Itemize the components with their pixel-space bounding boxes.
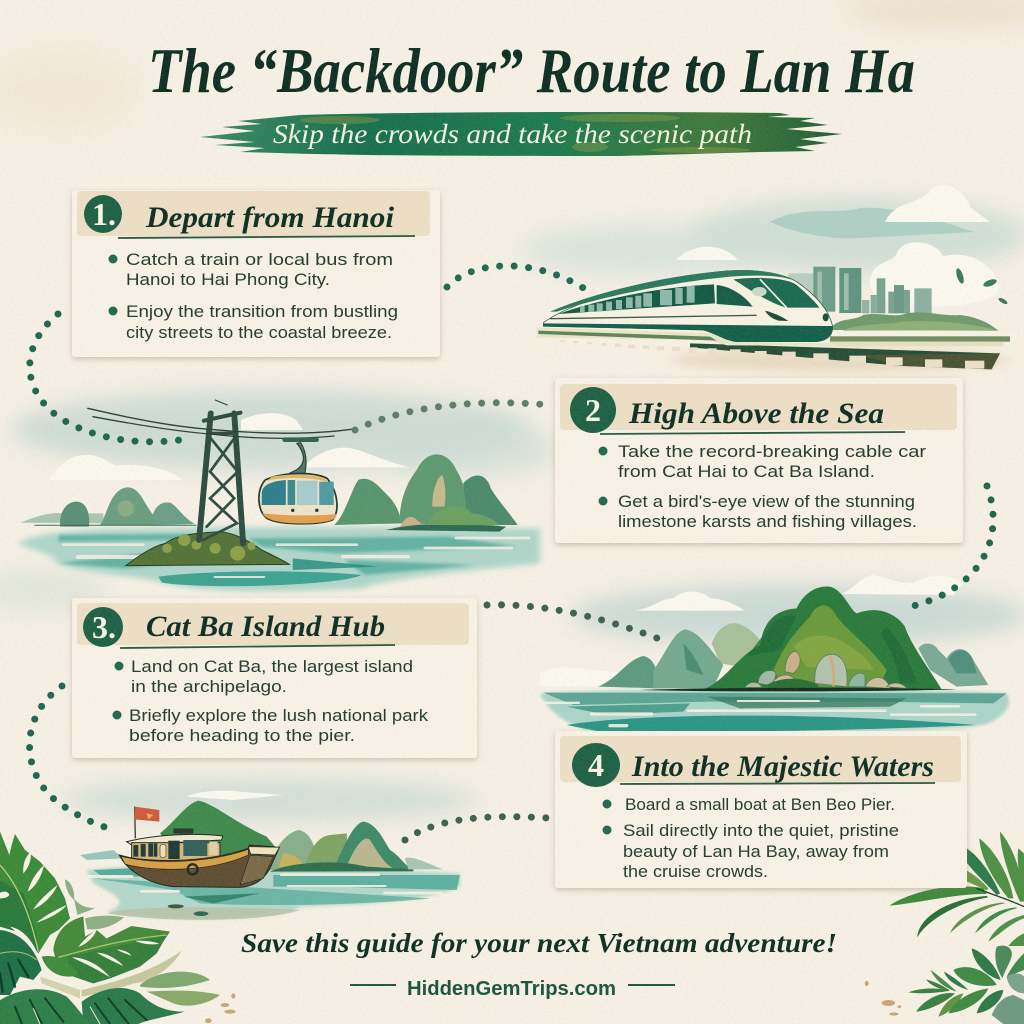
earth flecks [205,993,236,1023]
card 3 heading: Cat Ba Island Hub [146,610,385,643]
card 3: cat ba island hub [72,598,477,758]
center leaf [42,917,170,983]
tropical leaves bottom right [865,832,1024,1024]
monstera leaf [0,832,70,953]
background cloud [187,791,283,800]
card 3 number badge: 3. [92,609,116,645]
cables [88,400,351,438]
main island [640,586,957,691]
card 4 bullets: the cruise crowds. [623,863,768,881]
card 4 bullets: beauty of Lan Ha Bay, away from [623,843,889,861]
cable car illustration [17,400,540,591]
lower frond [908,946,1024,1024]
card 1 bullets: city streets to the coastal breeze. [126,324,392,342]
card 3 bullets [112,658,429,745]
far karsts [598,623,988,688]
earth flecks [865,981,901,1016]
upper palm frond [889,832,1024,946]
card 4 number badge [572,743,620,787]
bay island illustration [540,575,1009,732]
card 3 heading strip [77,603,469,645]
lower fronds [0,988,185,1024]
sea [17,527,540,591]
upper right clouds [676,185,990,260]
card 4 bullets [602,796,899,881]
treeline [830,312,998,331]
gondola [259,437,337,524]
card 1 bullets [108,251,398,342]
card 2 heading strip [560,384,957,430]
subtitle brush banner [200,112,842,156]
card 2 bullets: limestone karsts and fishing villages. [618,513,917,531]
card 4 bullets: Sail directly into the quiet, pristine [623,822,899,840]
card 2 number badge: 2 [585,392,601,428]
small leaves by skyline [955,267,1008,305]
sea [540,689,1009,732]
boat illustration [80,791,460,920]
left karsts [21,487,196,527]
card 1 bullets: Catch a train or local bus from [126,251,393,269]
card 3 number badge [83,607,123,647]
card 1 bullets: Hanoi to Hai Phong City. [126,271,330,289]
title: The “Backdoor” Route to Lan Ha [148,35,915,106]
card 1 number badge [84,195,122,233]
boat [119,807,279,887]
tropical leaves bottom left [0,832,236,1024]
card 2 number badge [570,387,616,433]
call to action: Save this guide for your next Vietnam adventure! [241,928,837,958]
card 3 bullets: Briefly explore the lush national park [129,707,429,725]
card 3 bullets: before heading to the pier. [129,727,355,745]
card 2 bullets: Take the record-breaking cable car [618,443,927,461]
card 1 bullets: Enjoy the transition from bustling [126,303,398,321]
card 1: depart from Hanoi [72,190,440,357]
dotted route paths [30,266,993,840]
card 1 number badge: 1. [92,196,116,232]
sea [80,850,460,920]
card 2 bullets [598,443,927,531]
card 1 heading strip [77,191,430,236]
clouds behind train [870,242,999,307]
card 4 heading: Into the Majestic Waters [631,750,934,783]
card 1 heading: Depart from Hanoi [145,201,395,234]
clouds [540,575,963,687]
card 4 heading strip [560,736,961,782]
train illustration [537,242,1017,369]
rail bed [537,327,1017,369]
card 4 bullets: Board a small boat at Ben Beo Pier. [625,796,895,814]
lower dark leaf [0,930,42,995]
pale stalk leaf [65,879,124,929]
card 2 bullets: Get a bird's-eye view of the stunning [618,493,915,511]
website footer: HiddenGemTrips.com [407,978,616,1000]
card 3 bullets: Land on Cat Ba, the largest island [131,658,413,676]
mini island under tower [126,532,289,566]
card 2 heading: High Above the Sea [628,397,884,430]
pylon [199,413,243,543]
card 2: high above the sea [555,378,963,543]
card 2 bullets: from Cat Hai to Cat Ba Island. [618,463,875,481]
card 4: into the majestic waters [555,731,967,888]
clouds [48,413,410,480]
far karsts [160,801,443,872]
train body [543,270,833,342]
subtitle brush banner: Skip the crowds and take the scenic path [273,119,752,149]
card 4 number badge: 4 [588,747,604,783]
skyline [788,267,932,313]
pale leaves [40,951,220,1006]
card 3 bullets: in the archipelago. [131,678,287,696]
right karsts [334,454,518,532]
